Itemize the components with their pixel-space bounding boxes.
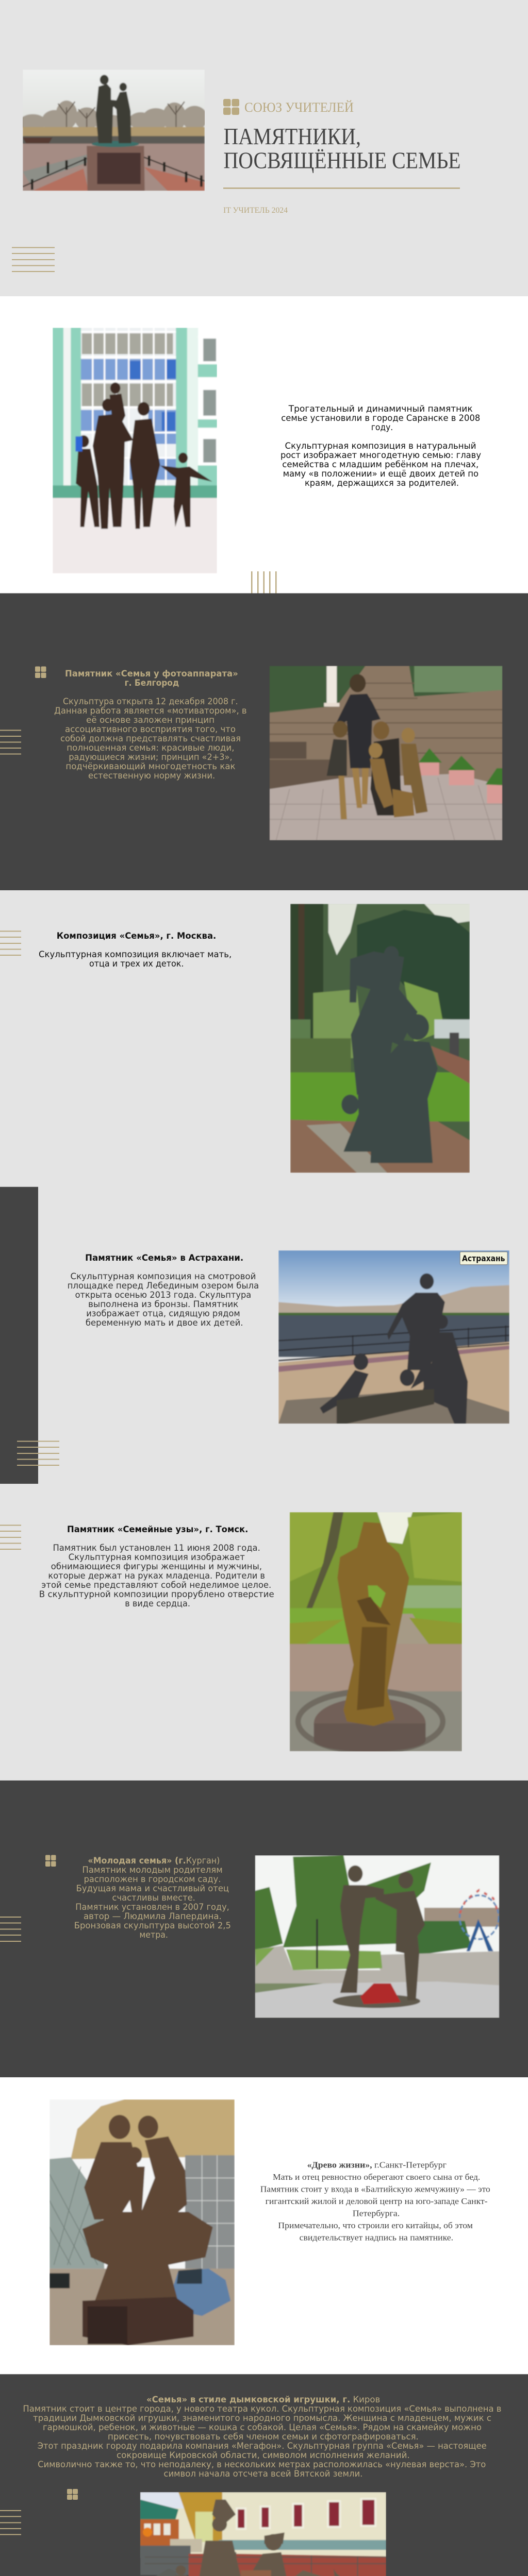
- description text: рост изображает многодетную семью: главу: [280, 450, 481, 460]
- description text: семейства с младшим ребёнком на плечах,: [282, 460, 478, 469]
- icon: four squares: [35, 667, 46, 678]
- text: Tomsk: этой семье представляют собой неделимое целое.: [41, 1580, 271, 1590]
- icon: four squares: [45, 1855, 56, 1867]
- text: Astrakhan: беременную мать и двое их детей.: [86, 1318, 243, 1328]
- panel: header: [0, 0, 528, 296]
- text: Tomsk: которые держат на руках младенца. Родители в: [48, 1571, 265, 1581]
- text: Kirov: «Семья» в стиле дымковской игрушки, г. Киров: [146, 2395, 380, 2404]
- text: Moscow: [39, 950, 232, 969]
- text: Tomsk: Памятник был установлен 11 июня 2008 года.: [53, 1543, 260, 1553]
- subtitle: IT УЧИТЕЛЬ 2024: [223, 206, 288, 215]
- text: Kirov: символ начала отсчета всей Вятской земли.: [163, 2469, 362, 2479]
- text: Kurgan: [74, 1856, 231, 1940]
- panel: Moscow, Astrakhan and Tomsk: [0, 890, 528, 1781]
- panel: Belgorod: [0, 594, 528, 890]
- description text: [54, 697, 247, 781]
- panel: Saransk: [0, 296, 528, 594]
- text: Kirov: присесть, почувствовать себя членом семьи и сфотографироваться.: [108, 2432, 419, 2442]
- title: [224, 123, 461, 173]
- sidebar band: [0, 1187, 38, 1484]
- title: ПАМЯТНИКИ,: [224, 123, 361, 149]
- text: Kirov: Символично также то, что неподалеку, в нескольких метрах расположилась «нулевая верста». Это: [38, 2460, 486, 2469]
- text: Kurgan: счастливы вместе.: [112, 1893, 195, 1903]
- description text: радующиеся жизни; принцип «2+3»,: [69, 752, 233, 762]
- text: Tomsk: в виде сердца.: [125, 1599, 190, 1608]
- text: Tomsk: В скульптурной композиции прорублено отверстие: [39, 1589, 274, 1599]
- map label: Астрахань: [462, 1253, 505, 1263]
- text: Kurgan: «Молодая семья» (г.Курган): [88, 1856, 220, 1866]
- text: Astrakhan: изображает отца, сидящую рядом: [86, 1309, 240, 1318]
- text: Astrakhan: Скульптурная композиция на смотровой: [70, 1272, 256, 1281]
- heading: Moscow: Композиция «Семья», г. Москва.: [57, 931, 216, 941]
- text: Tree of life: свидетельствует надпись на памятнике.: [300, 2232, 453, 2242]
- text: Kirov: сокровище Кировской области, символом исполнения желаний.: [117, 2450, 410, 2460]
- heading: [65, 669, 238, 688]
- photo: Dymkovo family: [140, 2492, 386, 2576]
- text: Astrakhan: открыта осенью 2013 года. Скульптура: [75, 1290, 251, 1300]
- title: ПОСВЯЩЁННЫЕ СЕМЬЕ: [224, 147, 461, 173]
- text: Kurgan: расположен в городском саду.: [84, 1874, 221, 1884]
- description text: маму «в положении» и ещё двоих детей по: [283, 469, 478, 479]
- text: Kurgan: Памятник молодым родителям: [82, 1865, 223, 1875]
- text: Kurgan: автор — Людмила Лапердина.: [84, 1911, 222, 1921]
- panel: Kirov: [0, 2374, 528, 2576]
- text: Astrakhan: площадке перед Лебединым озером была: [68, 1281, 259, 1291]
- description text: её основе заложен принцип: [86, 715, 214, 725]
- description text: Данная работа является «мотиватором», в: [54, 706, 247, 716]
- text: Tree of life: Памятник стоит у входа в «Балтийскую жемчужину» — это: [260, 2184, 490, 2194]
- icon: four squares logo: [223, 99, 239, 115]
- text: Kurgan: Бронзовая скульптура высотой 2,5: [74, 1921, 231, 1930]
- text: Kirov: Памятник стоит в центре города, у нового театра кукол. Скульптурная композиция «Семья» выполнена в: [23, 2404, 501, 2414]
- text: Tomsk: [39, 1543, 274, 1608]
- photo: Peter and Fevronia monument: [19, 70, 207, 191]
- panel: Kurgan: [0, 1781, 528, 2077]
- description text: [280, 404, 481, 488]
- description text: ассоциативного восприятия того, что: [65, 724, 236, 734]
- description text: семье установили в городе Саранске в 2008: [281, 413, 480, 423]
- text: Kirov: гармошкой, ребенок, и животные — кошка с собакой. Целая «Семья». Рядом на скамейку можно: [43, 2422, 482, 2432]
- text: Astrakhan: выполнена из бронзы. Памятник: [88, 1299, 238, 1309]
- photo: Moscow family sculpture: [290, 904, 470, 1173]
- text: Tree of life: [260, 2160, 490, 2242]
- description text: полноценная семья: красивые люди,: [67, 743, 235, 753]
- text: Tree of life: Примечательно, что строили его китайцы, об этом: [278, 2221, 473, 2230]
- text: Kirov: Этот праздник городу подарила компания «Мегафон». Скульптурная группа «Семья» — настоящее: [37, 2441, 487, 2451]
- heading: Tomsk: Памятник «Семейные узы», г. Томск.: [67, 1524, 248, 1534]
- photo: family at the camera: [269, 666, 502, 841]
- text: Tomsk: Скульптурная композиция изображает: [69, 1552, 245, 1562]
- description text: естественную норму жизни.: [88, 771, 215, 781]
- text: Tree of life: «Древо жизни», г.Санкт-Петербург: [307, 2160, 447, 2170]
- text: Kirov: традиции Дымковской игрушки, знаменитого народного промысла. Женщина с младенцем, мужик с: [33, 2413, 491, 2423]
- heading: г. Белгород: [125, 678, 179, 688]
- heading: Astrakhan: Памятник «Семья» в Астрахани.: [85, 1253, 243, 1263]
- text: Tree of life: гигантский жилой и деловой центр на юго-западе Санкт-: [266, 2196, 488, 2206]
- icon: four squares: [67, 2489, 78, 2500]
- photo: Saransk family monument: [53, 328, 217, 573]
- description text: краям, держащихся за родителей.: [305, 478, 459, 488]
- description text: подчёркивающий многодетность как: [65, 761, 236, 771]
- photo: tree of life: [50, 2099, 235, 2345]
- photo: Astrakhan family monument: [278, 1250, 509, 1424]
- text: Astrakhan: [68, 1272, 259, 1328]
- text: Tomsk: обнимающиеся фигуры женщины и мужчины,: [51, 1562, 262, 1571]
- text: Tree of life: Петербурга.: [353, 2208, 400, 2218]
- text: Kurgan: метра.: [139, 1930, 168, 1940]
- photo: Tomsk family ties: [290, 1512, 462, 1752]
- description text: году.: [371, 422, 393, 432]
- text: Moscow: отца и трех их деток.: [89, 959, 184, 969]
- text: Kirov: [23, 2395, 501, 2479]
- text: Kurgan: Будущая мама и счастливый отец: [76, 1884, 229, 1893]
- text: Kurgan: Памятник установлен в 2007 году,: [75, 1902, 229, 1912]
- description text: собой должна представлять счастливая: [60, 734, 241, 743]
- heading: Памятник «Семья у фотоаппарата»: [65, 669, 238, 679]
- description text: Трогательный и динамичный памятник: [288, 404, 473, 414]
- text: Tree of life: Мать и отец ревностно оберегают своего сына от бед.: [273, 2172, 480, 2182]
- description text: Скульптура открыта 12 декабря 2008 г.: [63, 697, 238, 706]
- photo: young family Kurgan: [255, 1855, 499, 2018]
- description text: Скульптурная композиция в натуральный: [285, 441, 476, 451]
- text: Moscow: Скульптурная композиция включает мать,: [39, 950, 232, 959]
- panel: Saint Petersburg: [0, 2077, 528, 2375]
- brand name: СОЮЗ УЧИТЕЛЕЙ: [244, 100, 354, 115]
